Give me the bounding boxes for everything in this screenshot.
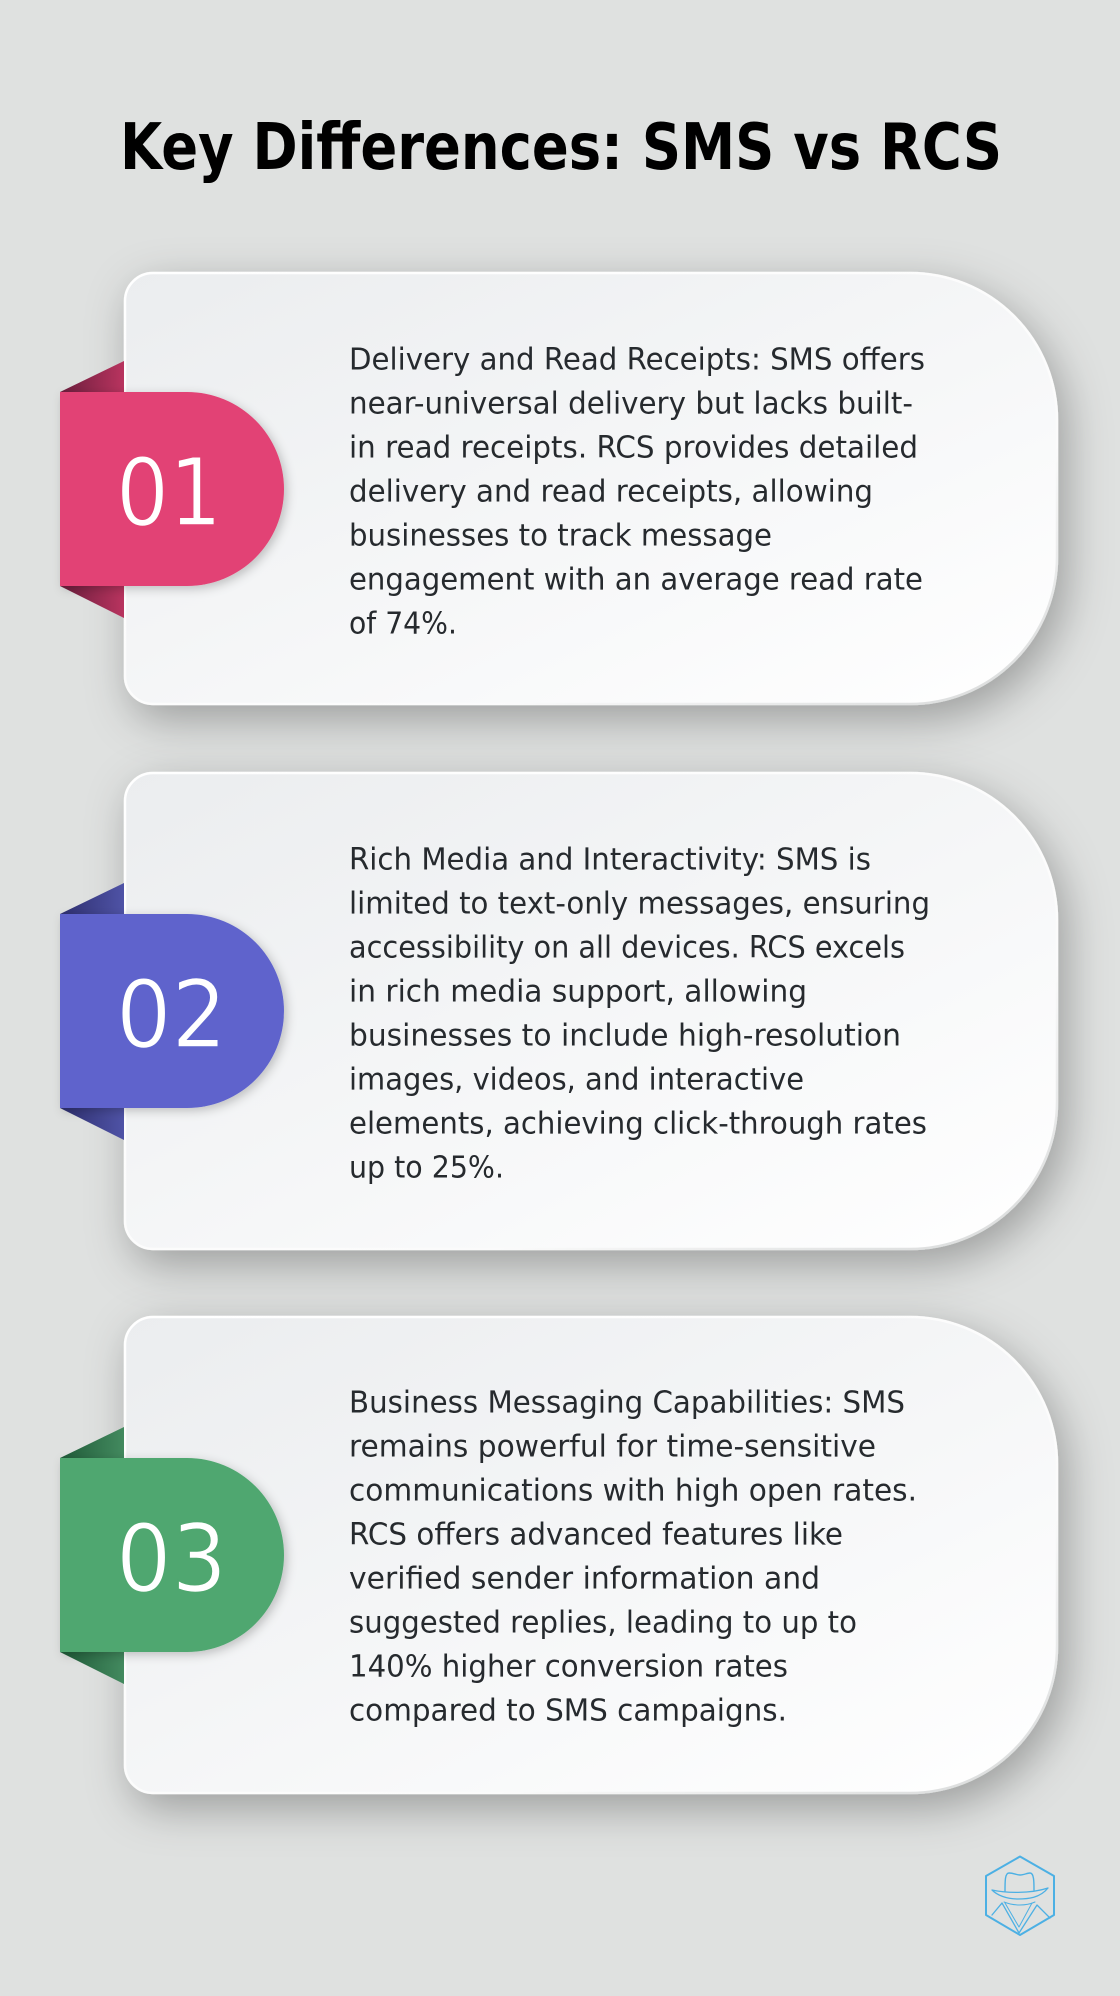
- text block 01: in read receipts. RCS provides detailed: [349, 430, 918, 466]
- text block 02: up to 25%.: [349, 1150, 504, 1186]
- text block 01: Delivery and Read Receipts: SMS offers: [349, 342, 925, 378]
- card background 02: [125, 773, 1057, 1249]
- ribbon fold top 02: [60, 883, 124, 914]
- text block 02: in rich media support, allowing: [349, 974, 807, 1010]
- text block 02: elements, achieving click-through rates: [349, 1106, 927, 1142]
- ribbon fold top 03: [60, 1427, 124, 1458]
- text block 01: [349, 342, 925, 642]
- icon: hexagon spy logo: [986, 1856, 1054, 1935]
- text block 02: limited to text-only messages, ensuring: [349, 886, 930, 922]
- card background 01: [125, 273, 1057, 704]
- panel: delivery and read receipts: [60, 273, 1057, 704]
- ribbon fold bottom 02: [60, 1108, 124, 1140]
- text block 02: accessibility on all devices. RCS excels: [349, 930, 905, 966]
- text block 01: near-universal delivery but lacks built-: [349, 386, 913, 422]
- text block 03: 140% higher conversion rates: [349, 1650, 788, 1684]
- text block 02: images, videos, and interactive: [349, 1062, 804, 1098]
- text block 02: Rich Media and Interactivity: SMS is: [349, 842, 871, 878]
- number 01: 01: [116, 439, 222, 548]
- number 02: 02: [116, 961, 227, 1070]
- text block 03: compared to SMS campaigns.: [349, 1694, 787, 1728]
- text block 03: verified sender information and: [349, 1562, 820, 1596]
- text block 01: businesses to track message: [349, 518, 772, 554]
- panel: business messaging capabilities: [60, 1317, 1057, 1793]
- ribbon fold bottom 01: [60, 586, 124, 618]
- text block 02: businesses to include high-resolution: [349, 1018, 901, 1054]
- number tab 03: [60, 1458, 284, 1652]
- number tab 01: [60, 392, 284, 586]
- ribbon fold top 01: [60, 361, 124, 392]
- number tab 02: [60, 914, 284, 1108]
- text block 03: remains powerful for time-sensitive: [349, 1430, 876, 1464]
- text block 03: suggested replies, leading to up to: [349, 1606, 857, 1640]
- text block 03: RCS offers advanced features like: [349, 1518, 843, 1552]
- text block 03: Business Messaging Capabilities: SMS: [349, 1386, 905, 1420]
- text block 03: [349, 1386, 917, 1728]
- text block 03: communications with high open rates.: [349, 1474, 917, 1508]
- card background 03: [125, 1317, 1057, 1793]
- text block 01: of 74%.: [349, 606, 457, 642]
- number 03: 03: [116, 1505, 227, 1614]
- text block 01: delivery and read receipts, allowing: [349, 474, 873, 510]
- text block 01: engagement with an average read rate: [349, 562, 923, 598]
- ribbon fold bottom 03: [60, 1652, 124, 1684]
- text block 02: [349, 842, 930, 1186]
- panel: rich media and interactivity: [60, 773, 1057, 1249]
